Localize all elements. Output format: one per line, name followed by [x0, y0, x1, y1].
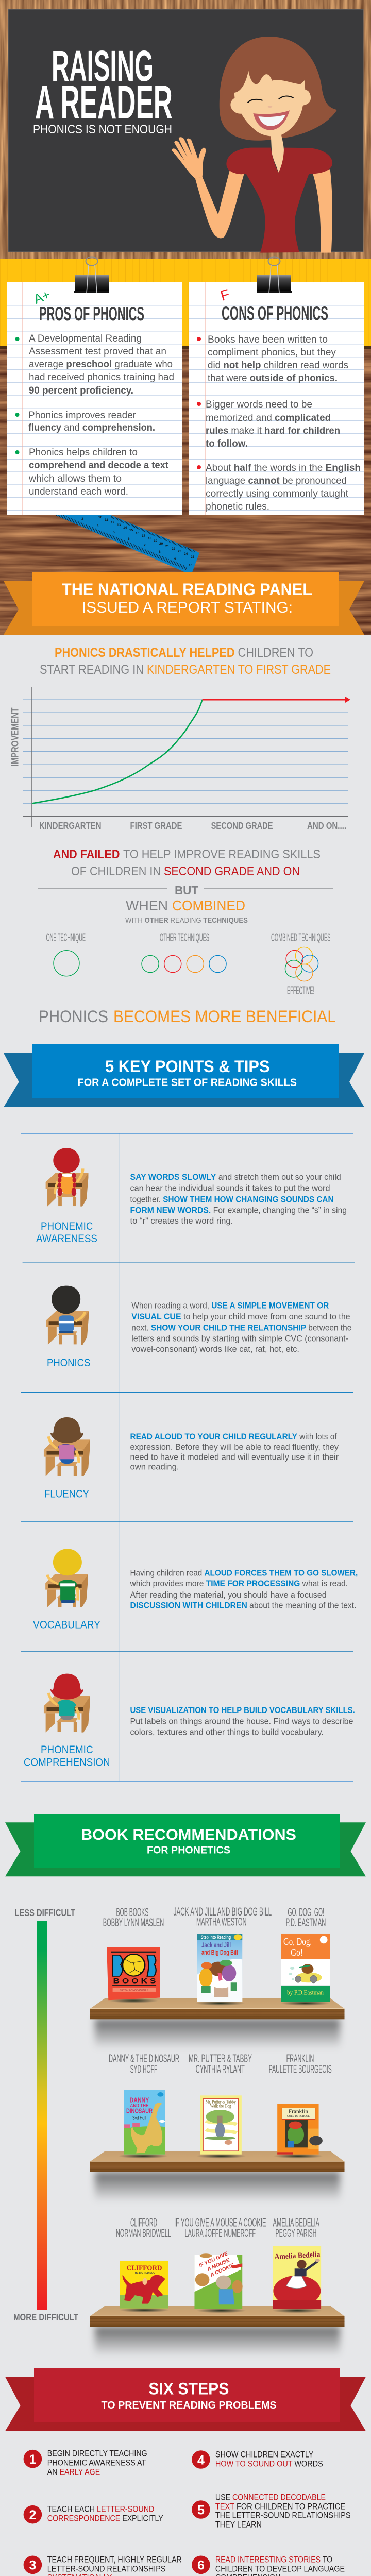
step 6 — [192, 2555, 345, 2576]
y axis label: IMPROVEMENT — [9, 707, 21, 767]
text: ONE TECHNIQUE — [46, 931, 86, 944]
pros bullet text: comprehend and decode a text — [29, 460, 169, 471]
ruler: 6 — [128, 537, 130, 541]
child icon: brown hair — [44, 1417, 90, 1476]
row 1: phonemic awareness — [36, 1148, 347, 1245]
panel: pros of phonics — [7, 282, 182, 515]
book: bob books — [107, 1947, 160, 2003]
banner: national reading panel: ISSUED A REPORT STATING: — [82, 599, 293, 616]
text: but when combined — [38, 884, 333, 925]
book: danny and the dinosaur: DANNY — [130, 2096, 149, 2104]
diagram: other techniques: OTHER TECHNIQUES — [160, 931, 209, 944]
red bullets — [197, 337, 201, 469]
book labels: JACK AND JILL AND BIG DOG BILL — [174, 1905, 272, 1918]
book: franklin — [273, 2104, 323, 2159]
pros bullet text: Phonics helps children to — [29, 447, 138, 458]
diagram: combined techniques — [271, 931, 331, 997]
text: and failed: AND FAILED — [53, 848, 120, 861]
banner: book recommendations: FOR PHONETICS — [147, 1845, 230, 1856]
ruler: 19 — [154, 539, 158, 543]
banner: national reading panel — [4, 572, 364, 635]
step 2: TEACH EACH LETTER-SOUND — [47, 2504, 154, 2514]
cons bullet text: Bigger words need to be — [206, 399, 312, 410]
pros bullet text: 90 percent proficiency. — [29, 385, 133, 396]
book: jack and jill: Step into Reading — [201, 1935, 231, 1940]
row text: SAY WORDS SLOWLY and stretch them out so your child — [130, 1172, 341, 1182]
book: if you give a mouse a cookie: A COOKIE — [209, 2263, 235, 2278]
book: mr putter and tabby: Mr. Putter & Tabby — [206, 2099, 236, 2105]
row text: letters and sounds by starting with simple CVC (consonant- — [131, 1333, 348, 1344]
book: if you give a mouse a cookie: A MOUSE — [206, 2258, 231, 2273]
banner: 5 key points: FOR A COMPLETE SET OF READING SKILLS — [78, 1077, 297, 1089]
book: danny and the dinosaur: DINOSAUR — [126, 2107, 153, 2115]
ruler: 11 — [105, 518, 108, 522]
row text: need to have it modeled and will eventually use it in their — [130, 1452, 339, 1462]
ruler: 25 — [191, 555, 195, 559]
row text: colors, textures and other things to build vocabulary. — [130, 1727, 324, 1737]
shelf 3 — [90, 2306, 345, 2357]
book: go dog go: by P.D.Eastman — [287, 1989, 324, 1996]
book labels: DANNY & THE DINOSAUR — [109, 2052, 179, 2065]
child icon: blond hair — [45, 1549, 88, 1607]
heading: phonics drastically helped: KINDERGARTEN TO FIRST GRADE — [147, 663, 331, 677]
x axis labels: FIRST GRADE — [130, 820, 182, 831]
x axis labels: AND ON.... — [307, 820, 346, 831]
row label: COMPREHENSION — [24, 1757, 110, 1769]
text: but when combined: COMBINED — [172, 897, 245, 913]
heading: phonics drastically helped: PHONICS DRASTICALLY HELPED — [55, 646, 235, 660]
step 5: TEXT FOR CHILDREN TO PRACTICE — [215, 2502, 345, 2511]
row 3: fluency — [44, 1417, 339, 1500]
step 5: USE CONNECTED DECODABLE — [215, 2493, 326, 2502]
x axis labels: SECOND GRADE — [211, 820, 273, 831]
difficulty scale: MORE DIFFICULT — [13, 2312, 78, 2323]
step 1: AN EARLY AGE — [47, 2467, 100, 2477]
banner: six steps — [5, 2368, 366, 2431]
ruler: 9 — [174, 557, 176, 561]
row text: DISCUSSION WITH CHILDREN about the meaning of the text. — [130, 1601, 357, 1611]
cons bullet text: to follow. — [206, 438, 248, 449]
step 2 — [24, 2504, 163, 2524]
book: clifford — [120, 2261, 169, 2313]
banner: 5 key points: 5 KEY POINTS & TIPS — [105, 1057, 270, 1076]
book: danny and the dinosaur: Syd Hoff — [132, 2115, 147, 2120]
step 3: 3 — [29, 2558, 36, 2573]
ruler: 18 — [148, 537, 152, 540]
pros bullet text: Assessment test proved that an — [29, 346, 166, 357]
book labels: NORMAN BRIDWELL — [116, 2227, 171, 2240]
header: chalkboard with wood frame — [0, 0, 371, 259]
book labels: CLIFFORD — [130, 2216, 157, 2229]
book labels: FRANKLIN — [286, 2052, 314, 2065]
step 4: HOW TO SOUND OUT WORDS — [215, 2459, 323, 2468]
cons bullet text: correctly using commonly taught — [206, 488, 349, 499]
cons bullet text: language cannot be pronounced — [206, 476, 347, 486]
ruler: 10 — [189, 564, 193, 567]
book: mr putter and tabby: Walk the Dog — [210, 2104, 231, 2109]
table: key points grid — [21, 1133, 355, 1781]
child icon: red hair — [44, 1674, 90, 1733]
step 4 — [192, 2450, 323, 2469]
step 1: PHONEMIC AWARENESS AT — [47, 2458, 146, 2467]
heading: phonics drastically helped — [40, 646, 331, 677]
text: phonics becomes more beneficial: PHONICS — [39, 1007, 108, 1026]
book: bob books: SET 5 • LONG VOWELS — [120, 1989, 148, 1992]
book: go dog go: Go! — [291, 1947, 303, 1958]
title: PHONICS IS NOT ENOUGH — [33, 123, 172, 137]
banner: six steps: SIX STEPS — [148, 2380, 229, 2398]
pros bullet text: average preschool graduate who — [29, 359, 173, 370]
ruler: 14 — [123, 526, 127, 530]
child icon: black hair — [46, 1286, 89, 1345]
pros bullet text: understand each word. — [29, 486, 128, 497]
text: but when combined: WHEN — [126, 897, 168, 913]
book: go dog go — [280, 1934, 330, 2006]
row text — [130, 1172, 347, 1226]
pros bullet text: Phonics improves reader — [28, 410, 137, 421]
pros bullet text: which allows them to — [28, 473, 122, 484]
step 6: 6 — [197, 2558, 205, 2573]
row text: VISUAL CUE to help your child move from one sound to the — [131, 1312, 350, 1321]
step 6: CHILDREN TO DEVELOP LANGUAGE — [215, 2564, 345, 2573]
step 4: SHOW CHILDREN EXACTLY — [215, 2450, 313, 2459]
book: amelia bedelia: Amelia Bedelia — [274, 2250, 321, 2261]
yellow notepad backing and desk — [0, 259, 371, 635]
row text — [130, 1568, 358, 1611]
row 5: phonemic comprehension — [24, 1674, 355, 1769]
book labels: BOBBY LYNN MASLEN — [103, 1916, 164, 1929]
step 1: BEGIN DIRECTLY TEACHING — [47, 2449, 147, 2458]
teacher illustration — [172, 37, 337, 253]
step 1 — [24, 2449, 147, 2477]
step 1: 1 — [29, 2452, 36, 2467]
row label: FLUENCY — [44, 1488, 89, 1500]
book: if you give a mouse a cookie — [194, 2251, 246, 2313]
book labels: SYD HOFF — [130, 2062, 157, 2075]
text: and failed: TO HELP IMPROVE READING SKILLS — [123, 848, 321, 861]
shelf 1 — [90, 1998, 345, 2049]
cons bullet text: memorized and complicated — [206, 413, 331, 423]
row text: Having children read ALOUD FORCES THEM TO GO SLOWER, — [130, 1568, 358, 1578]
pros bullet text: had received phonics training had — [29, 372, 174, 383]
binder clips — [74, 257, 292, 293]
book labels: CYNTHIA RYLANT — [196, 2062, 245, 2075]
book: jack and jill — [195, 1934, 245, 2006]
book: danny and the dinosaur — [119, 2090, 168, 2159]
step 3: TEACH FREQUENT, HIGHLY REGULAR — [47, 2555, 182, 2564]
step 2: 2 — [29, 2508, 36, 2522]
book: mr putter and tabby — [196, 2095, 246, 2159]
cons bullet text: did not help children read words — [208, 360, 348, 371]
row text: expression. Before they will be able to read fluently, they — [130, 1442, 339, 1452]
ruler: 15 — [129, 529, 133, 532]
ruler: 22 — [172, 547, 176, 551]
grade: F: F — [218, 286, 231, 304]
row text — [130, 1705, 355, 1737]
ruler: 8 — [159, 550, 161, 554]
ruler — [56, 514, 199, 575]
ruler: 24 — [184, 552, 188, 556]
child icon: red braids — [46, 1148, 88, 1207]
step 5: THE LETTER-SOUND RELATIONSHIPS — [215, 2511, 350, 2520]
row label: PHONEMIC — [41, 1221, 93, 1232]
pros bullet text — [28, 333, 174, 497]
ruler: 5 — [113, 531, 115, 534]
step 3: LETTER-SOUND RELATIONSHIPS — [47, 2564, 165, 2573]
ruler: 4 — [97, 524, 99, 528]
book: franklin: Franklin — [289, 2109, 309, 2115]
difficulty scale: LESS DIFFICULT — [14, 1908, 75, 1918]
grade: A+: A+ — [32, 287, 52, 307]
diagram: combined techniques: EFFECTIVE! — [287, 984, 314, 997]
text: and failed: OF CHILDREN IN — [71, 865, 161, 878]
cons bullet text: phonetic rules. — [206, 501, 269, 512]
banner: 5 key points — [4, 1044, 364, 1107]
row text — [131, 1300, 351, 1354]
red flat line with arrow — [203, 697, 350, 703]
line chart: improvement over grades — [9, 687, 350, 831]
book: bob books: B O O K S — [113, 1976, 156, 1985]
row text: which provides more TIME FOR PROCESSING what is read. — [130, 1579, 348, 1588]
row text: next. SHOW YOUR CHILD THE RELATIONSHIP between the — [131, 1323, 351, 1332]
book labels: P.D. EASTMAN — [286, 1916, 326, 1929]
book: go dog go: Go, Dog. — [283, 1936, 312, 1947]
shelf 2 — [90, 2151, 345, 2202]
row text: together. SHOW THEM HOW CHANGING SOUNDS CAN — [130, 1194, 334, 1204]
ruler: 12 — [111, 521, 115, 524]
row text: FORM NEW WORDS. For example, changing the “s” in sing — [130, 1205, 347, 1215]
difficulty scale — [13, 1908, 78, 2323]
cons bullet text: rules make it hard for children — [206, 426, 340, 436]
row label: AWARENESS — [36, 1233, 97, 1245]
step 3 — [24, 2555, 182, 2576]
ruler: 20 — [159, 542, 163, 546]
text: phonics becomes more beneficial: BECOMES MORE BENEFICIAL — [113, 1007, 336, 1026]
pros bullet text: A Developmental Reading — [29, 333, 142, 344]
ruler: 3 — [81, 517, 83, 521]
book labels: LAURA JOFFE NUMEROFF — [185, 2227, 256, 2240]
cons bullet text: About half the words in the English — [206, 463, 361, 473]
banner: six steps: TO PREVENT READING PROBLEMS — [101, 2399, 276, 2411]
row text: READ ALOUD TO YOUR CHILD REGULARLY with lots of — [130, 1432, 337, 1442]
ruler: 16 — [136, 532, 140, 535]
book: clifford: CLIFFORD — [127, 2265, 162, 2273]
book labels — [103, 1905, 332, 2240]
row text: When reading a word, USE A SIMPLE MOVEMENT OR — [131, 1300, 329, 1310]
book labels: PEGGY PARISH — [275, 2227, 316, 2240]
cons bullet text — [206, 334, 361, 512]
x axis labels — [39, 820, 346, 831]
row text: After reading the material, you should have a focused — [130, 1590, 327, 1600]
banner: book recommendations — [5, 1814, 366, 1876]
row label: PHONEMIC — [41, 1744, 93, 1756]
panel: cons of phonics — [189, 282, 364, 515]
row text: can hear the individual sounds it takes to put the word — [130, 1183, 330, 1193]
book: danny and the dinosaur: AND THE — [130, 2103, 149, 2109]
title: RAISING — [52, 42, 154, 90]
row 2: phonics — [46, 1286, 351, 1369]
row label — [36, 1221, 97, 1245]
title — [33, 42, 173, 137]
step 4: 4 — [197, 2453, 205, 2467]
text: and failed — [53, 848, 321, 878]
row label: VOCABULARY — [33, 1619, 100, 1631]
step 5 — [192, 2493, 350, 2529]
book labels: AMELIA BEDELIA — [273, 2216, 319, 2229]
text: but when combined: WITH OTHER READING TECHNIQUES — [125, 917, 248, 925]
green curve — [32, 700, 203, 804]
step 2: CORRESPONDENCE EXPLICITLY — [47, 2514, 163, 2523]
step 5: 5 — [197, 2503, 205, 2517]
ruler: 17 — [142, 534, 146, 538]
diagram: other techniques — [142, 931, 226, 973]
book labels: IF YOU GIVE A MOUSE A COOKIE — [174, 2216, 266, 2229]
x axis labels: KINDERGARTEN — [39, 820, 101, 831]
heading: phonics drastically helped: CHILDREN TO — [238, 646, 313, 660]
diagram: one technique — [46, 931, 86, 976]
pros bullet text: fluency and comprehension. — [28, 422, 155, 433]
book: jack and jill: Jack and Jill — [201, 1941, 231, 1949]
row text: Put labels on things around the house. Find ways to describe — [130, 1717, 353, 1726]
row 4: vocabulary — [33, 1549, 358, 1631]
ruler: 21 — [165, 545, 170, 548]
book labels: MR. PUTTER & TABBY — [189, 2052, 252, 2065]
banner: book recommendations: BOOK RECOMMENDATIONS — [81, 1826, 296, 1843]
row text: vowel-consonant) words like cat, rat, hot, etc. — [131, 1344, 299, 1354]
cons bullet text: compliment phonics, but they — [208, 347, 336, 358]
row label: PHONICS — [47, 1357, 90, 1369]
book: amelia bedelia — [272, 2246, 322, 2313]
green bullets — [15, 337, 20, 454]
cons bullet text: Books have been written to — [208, 334, 328, 345]
text: and failed: SECOND GRADE AND ON — [164, 865, 300, 878]
row label — [24, 1744, 110, 1769]
step 6: READ INTERESTING STORIES TO — [215, 2555, 332, 2564]
book: if you give a mouse a cookie: IF YOU GIVE — [198, 2251, 229, 2269]
ruler: 23 — [178, 550, 182, 553]
text: but when combined: BUT — [175, 884, 199, 897]
ruler: 10 — [98, 516, 103, 519]
ruler: 7 — [144, 544, 146, 547]
row text — [130, 1432, 339, 1471]
book: franklin: GOES TO SCHOOL — [287, 2115, 310, 2118]
ruler: 13 — [117, 523, 121, 527]
book labels: GO. DOG. GO! — [288, 1906, 324, 1919]
book: jack and jill: and Big Dog Bill — [201, 1948, 238, 1956]
book labels: MARTHA WESTON — [196, 1915, 246, 1928]
title: A READER — [35, 76, 173, 129]
heading: pros: PROS OF PHONICS — [39, 303, 144, 325]
row text: own reading. — [130, 1462, 179, 1471]
cons bullet text: that were outside of phonics. — [208, 373, 338, 384]
row text: to “r” creates the word ring. — [130, 1216, 233, 1226]
heading: phonics drastically helped: START READING IN — [40, 663, 144, 677]
banner: national reading panel: THE NATIONAL READING PANEL — [62, 580, 312, 599]
book labels: BOB BOOKS — [116, 1906, 148, 1919]
book: clifford: THE BIG RED DOG — [133, 2272, 155, 2275]
step 5: THEY LEARN — [215, 2520, 262, 2529]
